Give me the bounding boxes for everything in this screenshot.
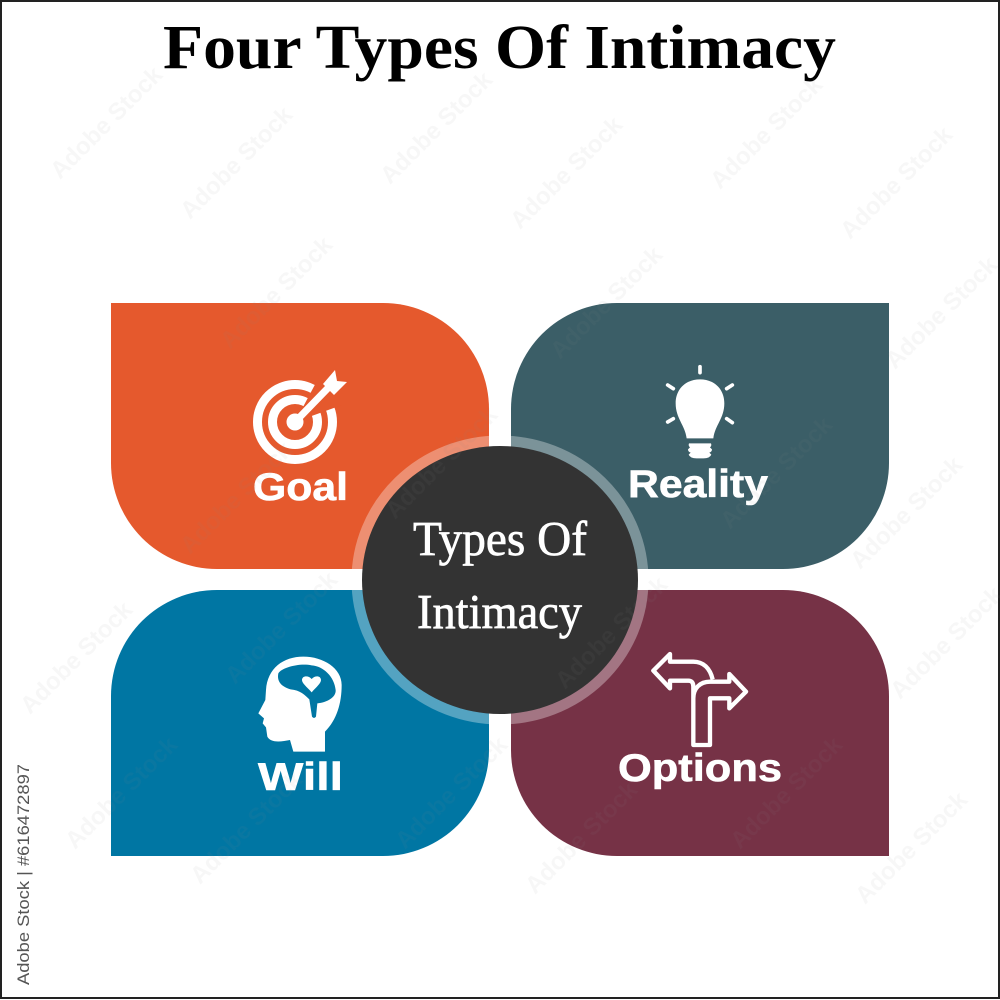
stock watermark grid: Adobe Stock xyxy=(390,731,513,854)
stock watermark grid: Adobe Stock xyxy=(375,66,498,189)
centre hub xyxy=(357,441,643,719)
panel shape: Reality xyxy=(511,303,889,569)
stock watermark grid: Adobe Stock xyxy=(545,241,668,364)
hub text: Types Of: Types Of xyxy=(413,511,588,566)
stock watermark grid: Adobe Stock xyxy=(220,566,343,689)
label: Will: Will xyxy=(258,756,343,799)
stock watermark grid: Adobe Stock xyxy=(705,71,828,194)
label: Options: Options xyxy=(618,747,782,790)
stock watermark grid: Adobe Stock xyxy=(845,451,968,574)
stock watermark grid: Adobe Stock xyxy=(880,251,1000,374)
stock watermark grid: Adobe Stock xyxy=(175,101,298,224)
icon: light bulb xyxy=(668,367,732,458)
stock watermark grid: Adobe Stock xyxy=(550,571,673,694)
stock watermark grid: Adobe Stock xyxy=(175,436,298,559)
stock watermark grid: Adobe Stock xyxy=(520,776,643,899)
panel: Options xyxy=(511,590,889,856)
panel shape: Goal xyxy=(111,303,489,569)
icon: two-way direction arrow xyxy=(653,654,746,745)
stock watermark grid: Adobe Stock xyxy=(185,766,308,889)
panel: Goal xyxy=(111,303,489,569)
stock watermark grid: Adobe Stock xyxy=(45,61,168,184)
stock watermark grid: Adobe Stock xyxy=(835,121,958,244)
stock watermark grid: Adobe Stock xyxy=(60,731,183,854)
stock credit: Adobe Stock | #616472897 xyxy=(14,764,33,985)
stock watermark grid: Adobe Stock xyxy=(725,731,848,854)
stock watermark grid: Adobe Stock xyxy=(15,596,138,719)
stock watermark grid: Adobe Stock xyxy=(850,786,973,909)
hub text: Intimacy: Intimacy xyxy=(417,584,582,639)
icon: head with brain and heart xyxy=(258,657,342,752)
dark circle xyxy=(362,446,638,714)
stock watermark grid: Adobe Stock xyxy=(505,111,628,234)
panel: Reality xyxy=(511,303,889,569)
translucent ring xyxy=(357,441,643,719)
stock watermark grid: Adobe Stock xyxy=(380,401,503,524)
panel: Will xyxy=(111,590,489,856)
icon: target with arrow xyxy=(258,370,347,460)
title: Four Types Of Intimacy xyxy=(163,14,836,82)
stock watermark grid: Adobe Stock xyxy=(215,231,338,354)
label: Goal: Goal xyxy=(253,466,348,509)
label: Reality: Reality xyxy=(628,463,768,506)
panel shape: Options xyxy=(511,590,889,856)
stock watermark grid: Adobe Stock xyxy=(715,411,838,534)
panel shape: Will xyxy=(111,590,489,856)
